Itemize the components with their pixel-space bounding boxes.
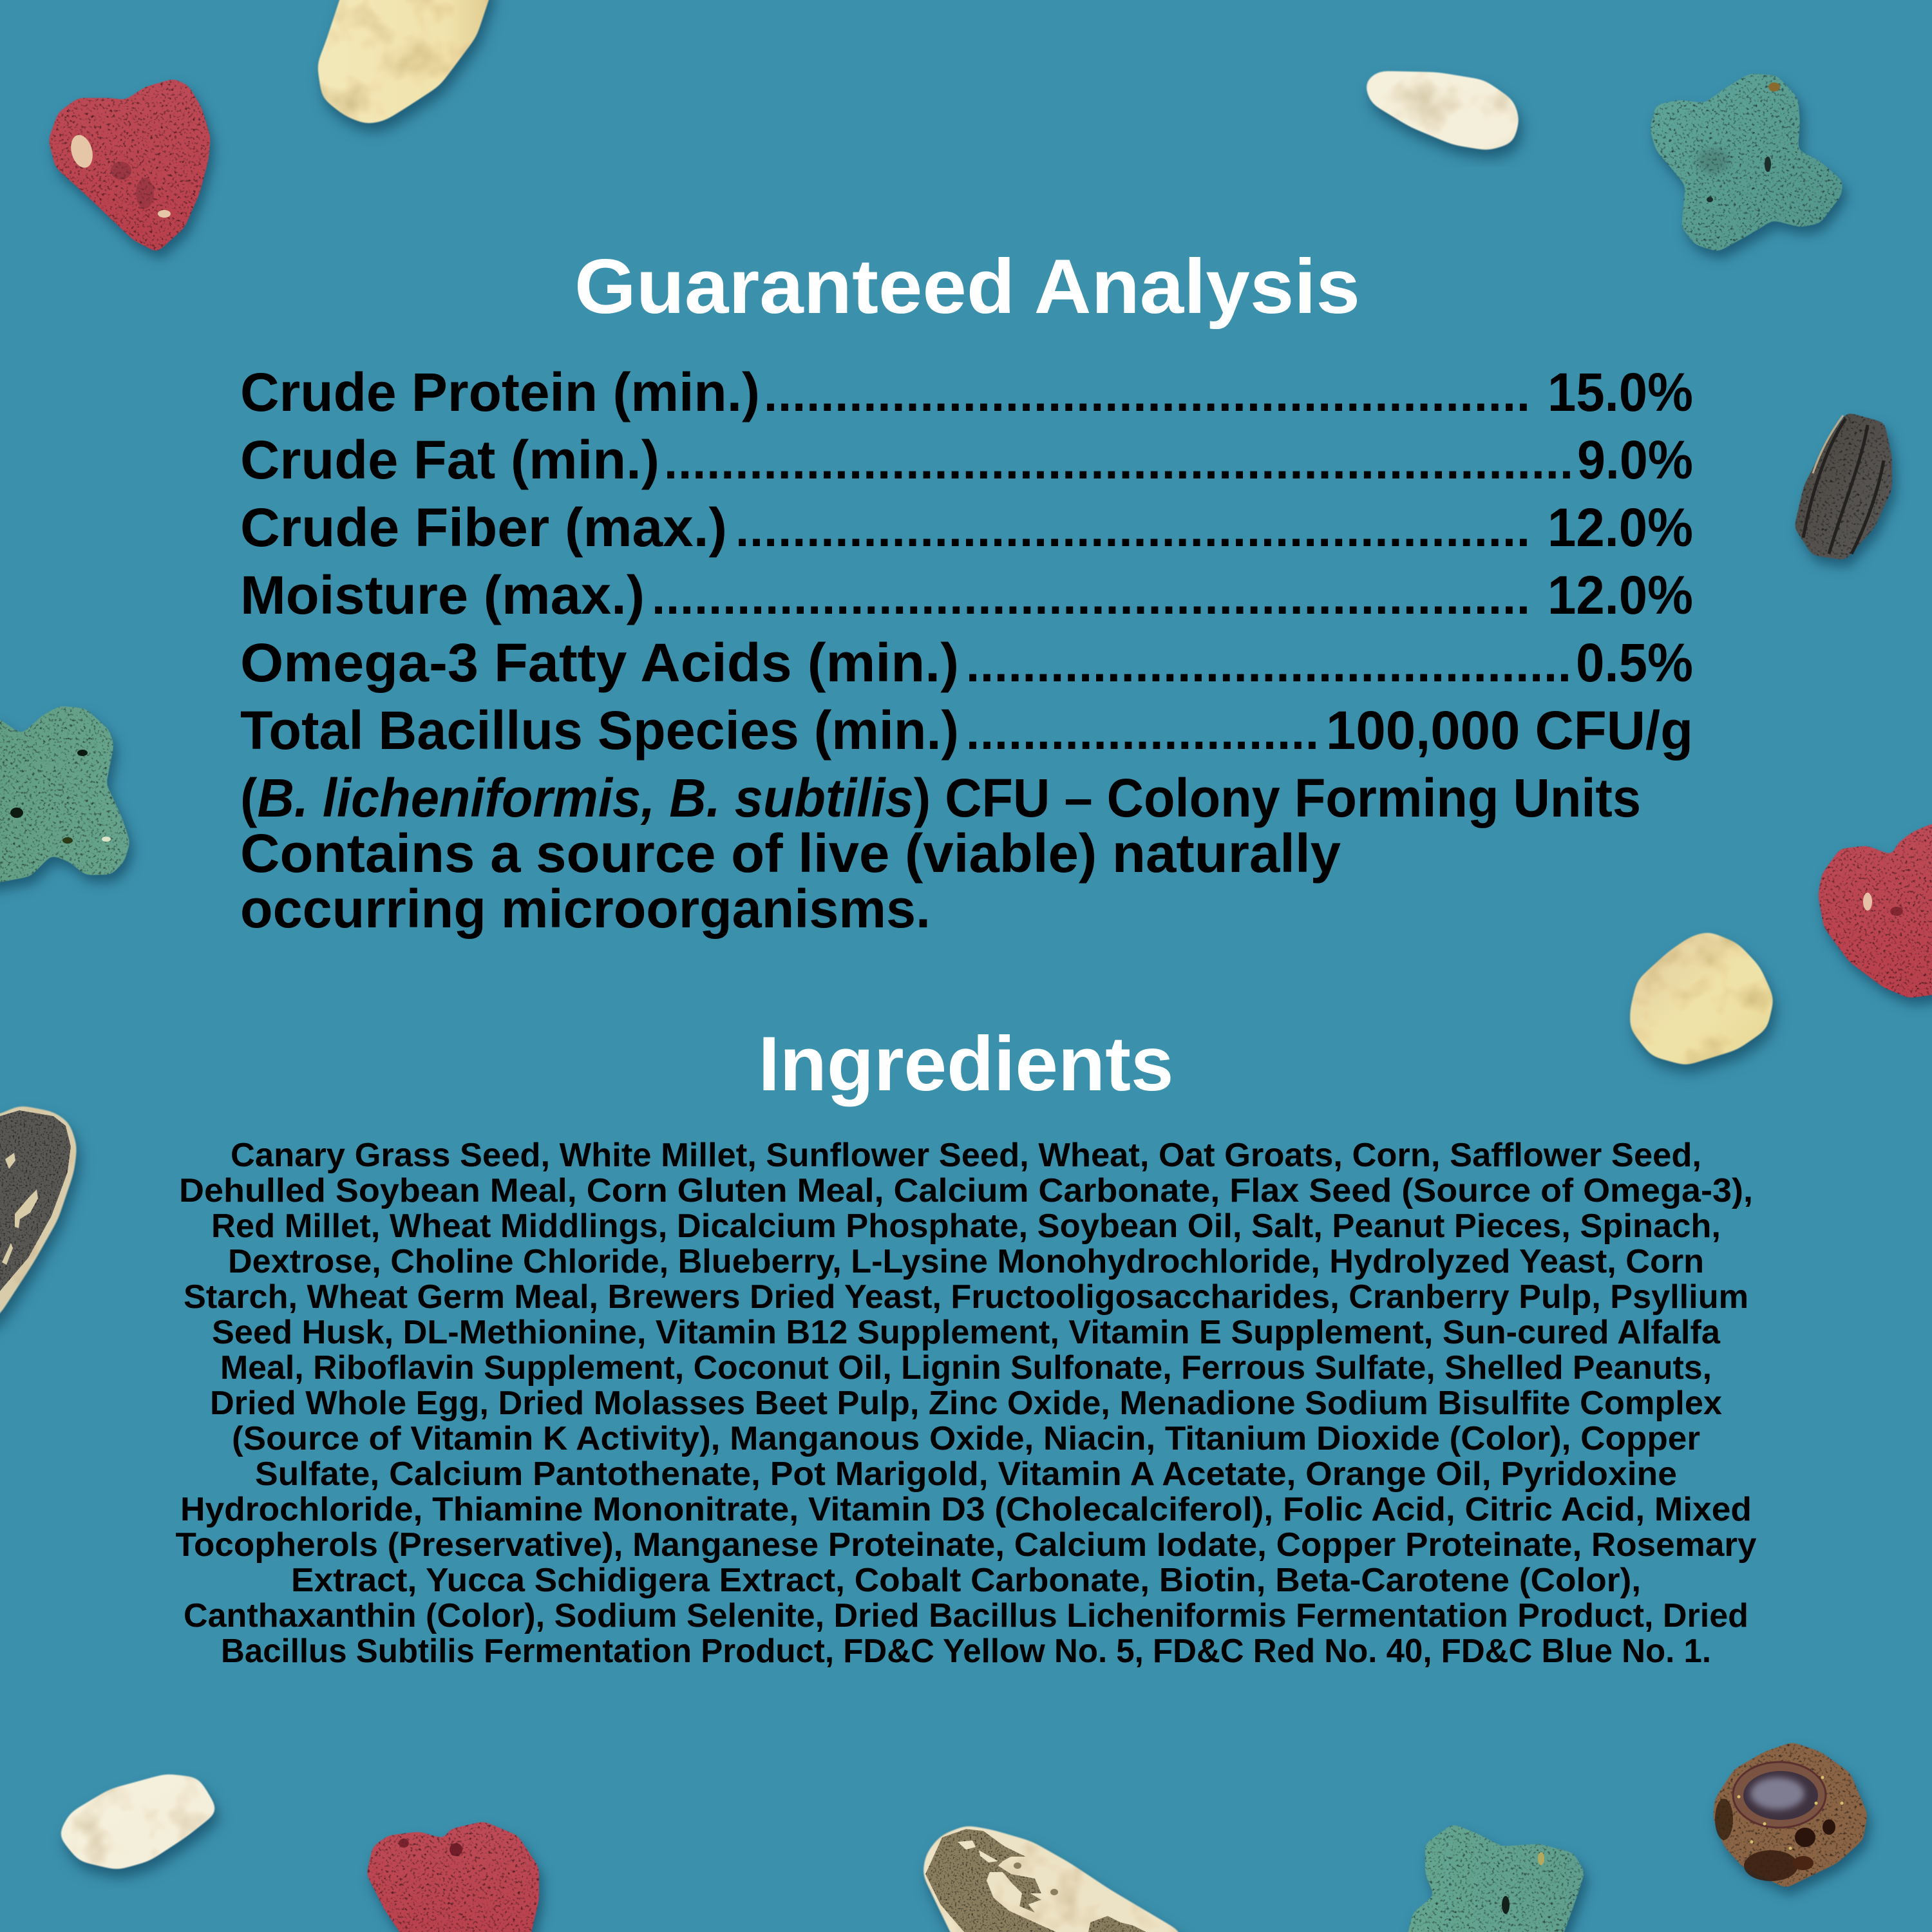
title: Ingredients: Ingredients (759, 1021, 1173, 1107)
brown rosette pellet bottom right (1713, 1742, 1868, 1888)
sunflower seed: striped bottom centre (922, 1825, 1182, 1932)
kibble: red heart top left (48, 79, 211, 252)
row: total bacillus (240, 700, 1693, 761)
row: crude protein (240, 362, 1693, 422)
row: crude fiber (240, 497, 1693, 558)
kibble: green cross left edge (0, 706, 130, 886)
row: crude fat: ................................................................ (664, 435, 1573, 489)
peanut: right side (1630, 931, 1774, 1066)
row: crude fat: 9.0% (1577, 430, 1693, 490)
row: crude fiber: Crude Fiber (max.) (240, 497, 727, 558)
row: moisture (240, 565, 1693, 625)
ingredients paragraph: Extract, Yucca Schidigera Extract, Cobalt Carbonate, Biotin, Beta-Carotene (Color), (291, 1562, 1641, 1599)
row: crude protein: Crude Protein (min.) (240, 362, 760, 422)
ingredients paragraph: Dried Whole Egg, Dried Molasses Beet Pulp, Zinc Oxide, Menadione Sodium Bisulfite Complex (210, 1385, 1722, 1422)
ingredients paragraph: Dehulled Soybean Meal, Corn Gluten Meal, Calcium Carbonate, Flax Seed (Source of Omega-3), (179, 1172, 1753, 1209)
ingredients paragraph: Canary Grass Seed, White Millet, Sunflower Seed, Wheat, Oat Groats, Corn, Safflower Seed, (231, 1137, 1701, 1174)
title: Guaranteed Analysis: Guaranteed Analysis (574, 243, 1360, 330)
row: crude protein: 15.0% (1548, 362, 1693, 422)
row: total bacillus: ......................... (966, 705, 1319, 760)
row: moisture: Moisture (max.) (240, 565, 645, 625)
ingredients paragraph: Dextrose, Choline Chloride, Blueberry, L-Lysine Monohydrochloride, Hydrolyzed Yeast, Corn (228, 1243, 1704, 1280)
ingredients paragraph: Bacillus Subtilis Fermentation Product, FD&C Yellow No. 5, FD&C Red No. 40, FD&C Blue No. 1. (221, 1633, 1711, 1670)
kibble: red heart bottom (366, 1821, 539, 1932)
row: omega-3: Omega-3 Fatty Acids (min.) (240, 632, 959, 693)
ingredients paragraph: Meal, Riboflavin Supplement, Coconut Oil, Lignin Sulfonate, Ferrous Sulfate, Shelled Peanuts, (220, 1349, 1712, 1387)
note: bacillus species and live microorganisms: occurring microorganisms. (240, 878, 931, 939)
ingredients paragraph: Starch, Wheat Germ Meal, Brewers Dried Yeast, Fructooligosaccharides, Cranberry Pulp, Psyllium (184, 1278, 1748, 1316)
row: crude fat (240, 430, 1693, 490)
sunflower seed: black left edge (0, 1105, 77, 1330)
kibble: red heart right edge (1818, 821, 1932, 998)
ingredients paragraph: (Source of Vitamin K Activity), Manganous Oxide, Niacin, Titanium Dioxide (Color), Copper (232, 1420, 1700, 1457)
row: omega-3: 0.5% (1576, 632, 1693, 693)
white seed: top right (1364, 71, 1520, 151)
ingredients paragraph: Red Millet, Wheat Middlings, Dicalcium Phosphate, Soybean Oil, Salt, Peanut Pieces, Spinach, (211, 1208, 1721, 1245)
white seed: bottom left (58, 1774, 218, 1870)
row: crude fiber: ........................................................ (735, 502, 1530, 557)
sunflower seed: black right (1794, 412, 1892, 560)
ingredients paragraph: Seed Husk, DL-Methionine, Vitamin B12 Supplement, Vitamin E Supplement, Sun-cured Alfalfa (212, 1314, 1721, 1351)
note: bacillus species and live microorganisms: Contains a source of live (viable) naturally (240, 823, 1341, 884)
kibble: green cross bottom (1403, 1824, 1585, 1932)
peanut: top centre-left (317, 0, 495, 124)
row: total bacillus: Total Bacillus Species (min.) (240, 700, 959, 761)
note: bacillus species and live microorganisms (240, 768, 1641, 939)
row: omega-3 (240, 632, 1693, 693)
row: omega-3: ........................................... (966, 638, 1571, 692)
guaranteed analysis table (240, 362, 1693, 761)
row: crude fat: Crude Fat (min.) (240, 430, 659, 490)
note: bacillus species and live microorganisms: (B. licheniformis, B. subtilis) CFU – Colony Forming Units (240, 768, 1641, 828)
ingredients paragraph: Tocopherols (Preservative), Manganese Proteinate, Calcium Iodate, Copper Proteinate, Rosemary (175, 1526, 1757, 1564)
row: crude fiber: 12.0% (1548, 497, 1693, 558)
ingredients paragraph: Canthaxanthin (Color), Sodium Selenite, Dried Bacillus Licheniformis Fermentation Product, Dried (184, 1597, 1748, 1634)
kibble: green cross top right (1650, 73, 1843, 252)
ingredients paragraph: Sulfate, Calcium Pantothenate, Pot Marigold, Vitamin A Acetate, Orange Oil, Pyridoxine (255, 1455, 1677, 1493)
row: total bacillus: 100,000 CFU/g (1326, 700, 1693, 761)
row: moisture: .............................................................. (652, 570, 1530, 625)
row: moisture: 12.0% (1548, 565, 1693, 625)
ingredients paragraph (175, 1137, 1757, 1670)
row: crude protein: ...................................................... (764, 367, 1530, 422)
ingredients paragraph: Hydrochloride, Thiamine Mononitrate, Vitamin D3 (Cholecalciferol), Folic Acid, Citric Acid, Mixed (180, 1491, 1752, 1528)
